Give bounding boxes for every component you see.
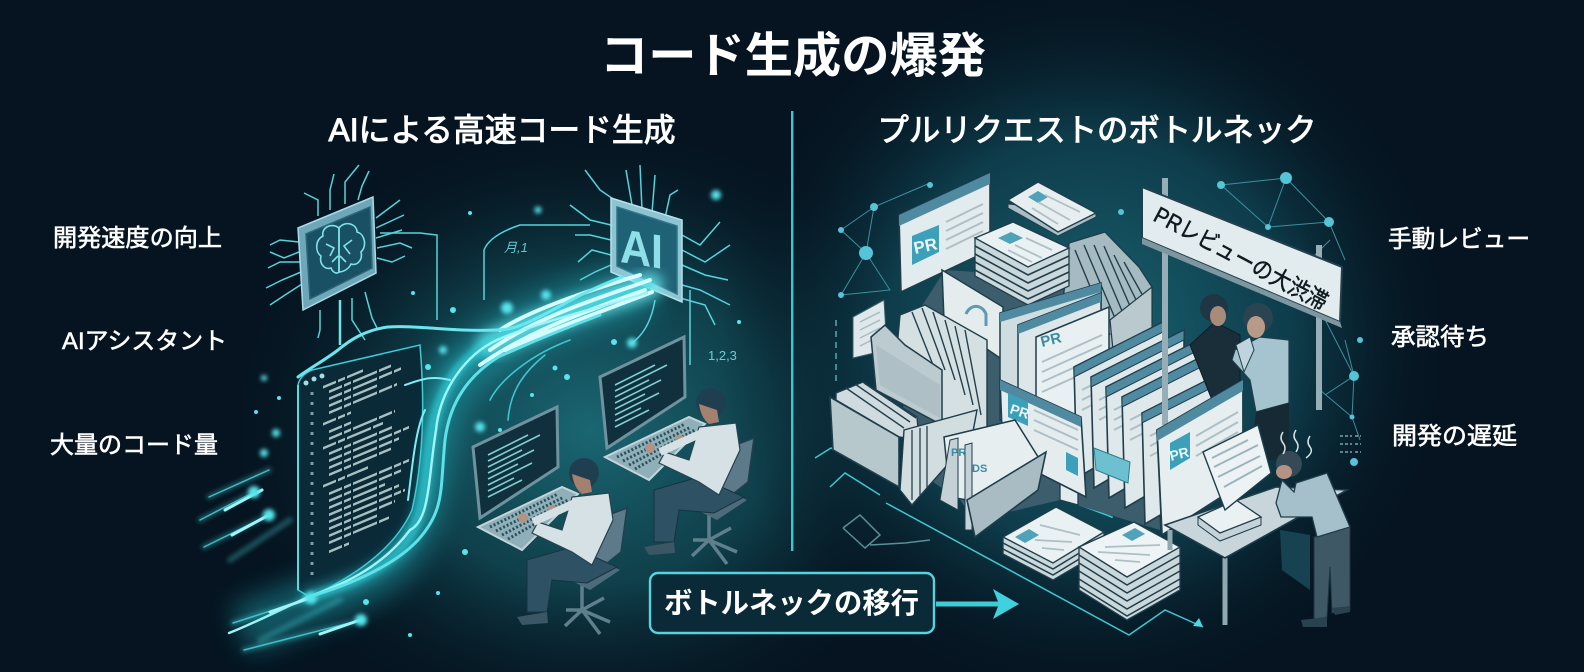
AI chip: 月,1	[504, 240, 528, 255]
front PR window: PR	[1168, 444, 1191, 464]
developer front	[473, 407, 627, 634]
small sheet left	[836, 300, 887, 382]
pile underlay	[900, 270, 1160, 530]
center panels: PR	[1039, 329, 1063, 351]
label: development speed: 開発速度の向上	[53, 225, 222, 252]
arrow	[936, 589, 1019, 619]
developer back	[600, 337, 754, 564]
label: code volume: 大量のコード量	[50, 432, 218, 459]
particles	[248, 190, 741, 637]
heading: left: AIによる高速コード生成	[328, 112, 676, 148]
sign text: PRレビューの大渋滞	[1150, 201, 1332, 315]
held paper	[1203, 425, 1271, 510]
flying document	[1008, 182, 1096, 236]
stressed developer at desk	[1165, 425, 1361, 627]
paper stack	[1198, 517, 1261, 541]
panel: PR bottleneck	[815, 172, 1363, 635]
PR window center: PR	[1008, 401, 1032, 422]
brain chip	[266, 165, 437, 345]
icon label: AI: AI	[620, 219, 663, 280]
glow behind stream	[240, 285, 650, 630]
bottom doc stack right	[1079, 522, 1180, 620]
AI chip: 1,2,3	[708, 348, 737, 363]
speed streaks	[200, 470, 361, 650]
heading: right: プルリクエストのボトルネック	[878, 112, 1316, 148]
PR window center	[1000, 380, 1086, 497]
network lines	[838, 172, 1363, 466]
icon: brain	[317, 224, 364, 273]
code window	[298, 345, 423, 597]
stack of documents	[975, 222, 1069, 305]
label: development delay: 開発の遅延	[1392, 423, 1517, 450]
callout: bottleneck shift: ボトルネックの移行	[664, 587, 919, 620]
floor circuit lines	[815, 448, 1203, 635]
folder group front	[900, 410, 1046, 537]
panel: AI code generation	[200, 165, 754, 650]
center panels	[1000, 283, 1109, 420]
AI chip	[484, 165, 737, 365]
sign	[1142, 178, 1342, 425]
callout: bottleneck shift	[650, 573, 934, 633]
folder group upper	[871, 305, 987, 432]
folder group front: PR	[951, 447, 966, 459]
left labels	[50, 225, 227, 459]
PR window top left	[899, 173, 990, 292]
label: waiting approval: 承認待ち	[1391, 324, 1489, 351]
arrowhead on floor	[1193, 618, 1203, 627]
label: manual review: 手動レビュー	[1388, 226, 1530, 253]
two worried people	[1190, 294, 1289, 460]
blue tag	[1094, 448, 1130, 483]
PR window top left: PR	[912, 234, 939, 258]
label: AI assistant: AIアシスタント	[62, 328, 227, 355]
folder group front: DS	[972, 463, 987, 475]
right labels	[1388, 226, 1530, 450]
folder front left	[830, 382, 919, 487]
data stream	[229, 275, 652, 633]
bottom doc stack left	[1003, 507, 1104, 580]
divider	[791, 111, 793, 551]
title: コード生成の爆発	[600, 30, 986, 83]
folder back right	[1060, 232, 1152, 420]
window with arch	[942, 270, 1003, 360]
code lines	[323, 351, 409, 554]
upright windows row	[1060, 320, 1235, 524]
front PR window	[1157, 380, 1243, 535]
